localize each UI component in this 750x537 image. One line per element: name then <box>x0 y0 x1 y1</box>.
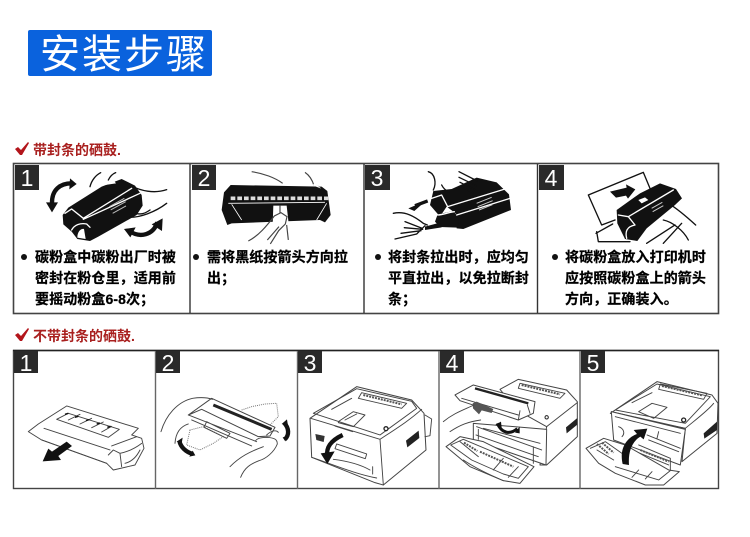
text: step 3: 将封条拉出时，应均匀 <box>388 249 529 265</box>
step 5 number <box>581 350 605 376</box>
step 3 number: 3 <box>304 350 316 376</box>
illustration: opening printer cover <box>310 387 432 485</box>
illustration: pulling black paper <box>222 172 331 244</box>
illustration: pulling the strip <box>393 172 511 239</box>
step 4 number: 4 <box>446 350 459 376</box>
heading: without seal strip: 不带封条的硒鼓. <box>33 328 135 344</box>
text: step 3: 平直拉出，以免拉断封 <box>388 270 529 286</box>
illustration: removing drum from printer <box>443 379 577 483</box>
panel: without seal strip steps <box>13 350 719 489</box>
step 2 number <box>192 165 216 191</box>
illustration: reinstalling drum <box>586 382 718 485</box>
step 1 number: 1 <box>21 165 33 191</box>
text: step 2: 出； <box>207 270 235 287</box>
step 3 number <box>365 165 390 191</box>
heading: with seal strip: 带封条的硒鼓. <box>33 142 121 158</box>
step 1 number <box>14 350 38 376</box>
step 4 number <box>539 165 564 191</box>
panel: with seal strip steps <box>14 164 718 314</box>
step 2 number: 2 <box>198 165 210 191</box>
text: step 1: 要摇动粉盒6-8次； <box>35 291 154 308</box>
step 3 number <box>298 350 322 376</box>
illustration: cartridge with seal pulled out <box>28 406 144 470</box>
text: step 1: 碳粉盒中碳粉出厂时被 <box>35 249 176 265</box>
step 3 number: 3 <box>371 165 383 191</box>
step 5 number: 5 <box>587 350 599 376</box>
text: step 1: 密封在粉仓里，适用前 <box>35 270 176 286</box>
text: step 1 <box>21 249 176 308</box>
text: step 4 <box>552 249 706 307</box>
illustration: loading cartridge <box>588 172 696 243</box>
illustration: shaking drum unit <box>161 398 289 477</box>
illustration: shaking cartridge <box>46 173 167 241</box>
step 2 number <box>156 350 180 376</box>
step 2 number: 2 <box>162 350 174 376</box>
step 1 number: 1 <box>20 350 32 376</box>
text: step 2 <box>193 249 348 287</box>
text: step 2: 需将黑纸按箭头方向拉 <box>207 249 348 265</box>
step 4 number <box>440 350 464 376</box>
text: step 4: 应按照碳粉盒上的箭头 <box>565 270 706 286</box>
text: step 4: 方向，正确装入。 <box>565 291 678 307</box>
step 1 number <box>15 165 39 191</box>
text: step 3: 条； <box>388 291 416 308</box>
title banner: 安装步骤 <box>40 33 206 77</box>
text: step 3 <box>375 249 529 308</box>
text: step 4: 将碳粉盒放入打印机时 <box>565 249 706 265</box>
step 4 number: 4 <box>545 165 558 191</box>
